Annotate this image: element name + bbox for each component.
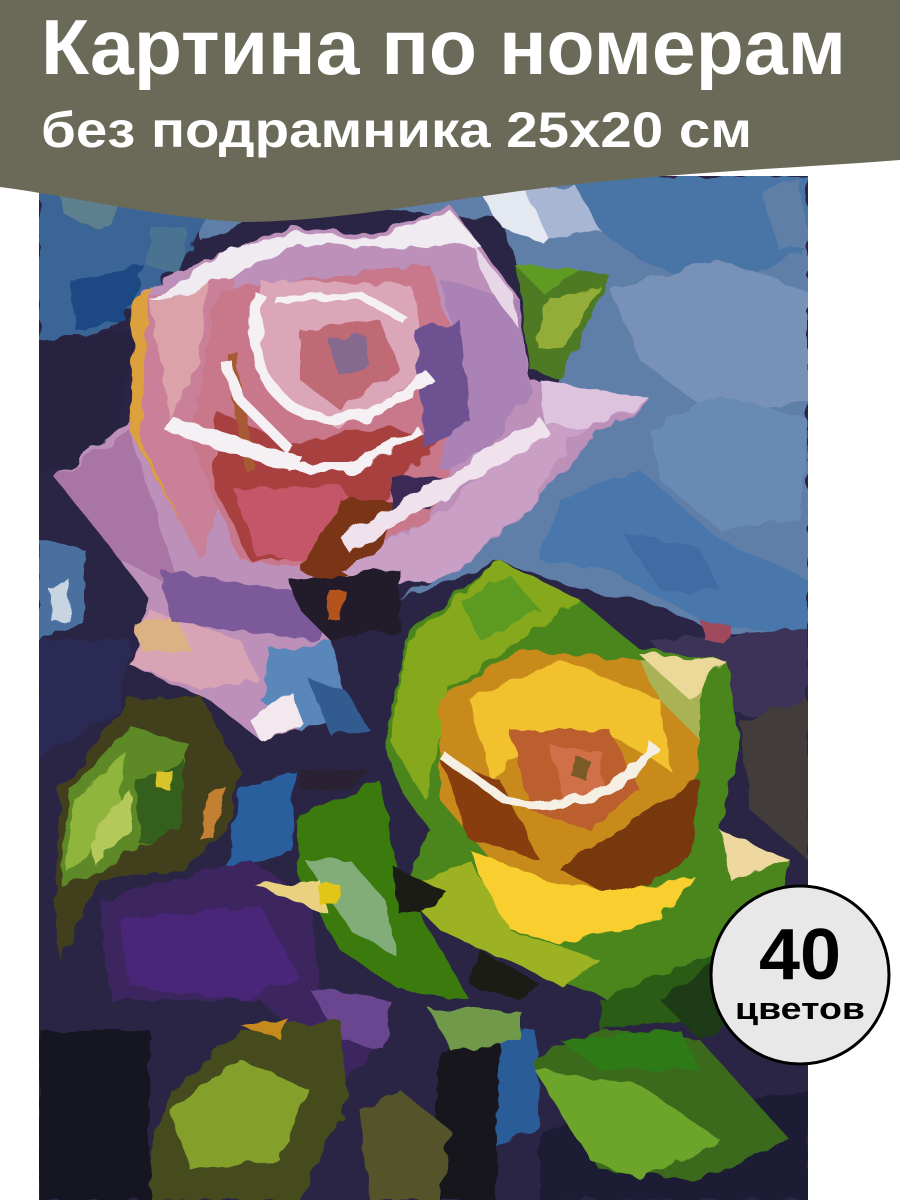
pink rose [55,205,650,740]
green leaf top right of pink rose [515,265,610,380]
lower leaves [150,950,790,1200]
subtitle: без подрамника 25х20 см [41,102,752,158]
header banner [0,0,900,222]
badge: 40 colours: цветов [735,991,865,1026]
painting background [39,176,808,1200]
title: Картина по номерам [41,3,846,91]
left green leaf [55,695,240,960]
yellow rose [255,560,790,1000]
badge: 40 colours [711,886,889,1064]
badge: 40 colours: 40 [759,915,841,995]
painting: roses [39,176,808,1200]
